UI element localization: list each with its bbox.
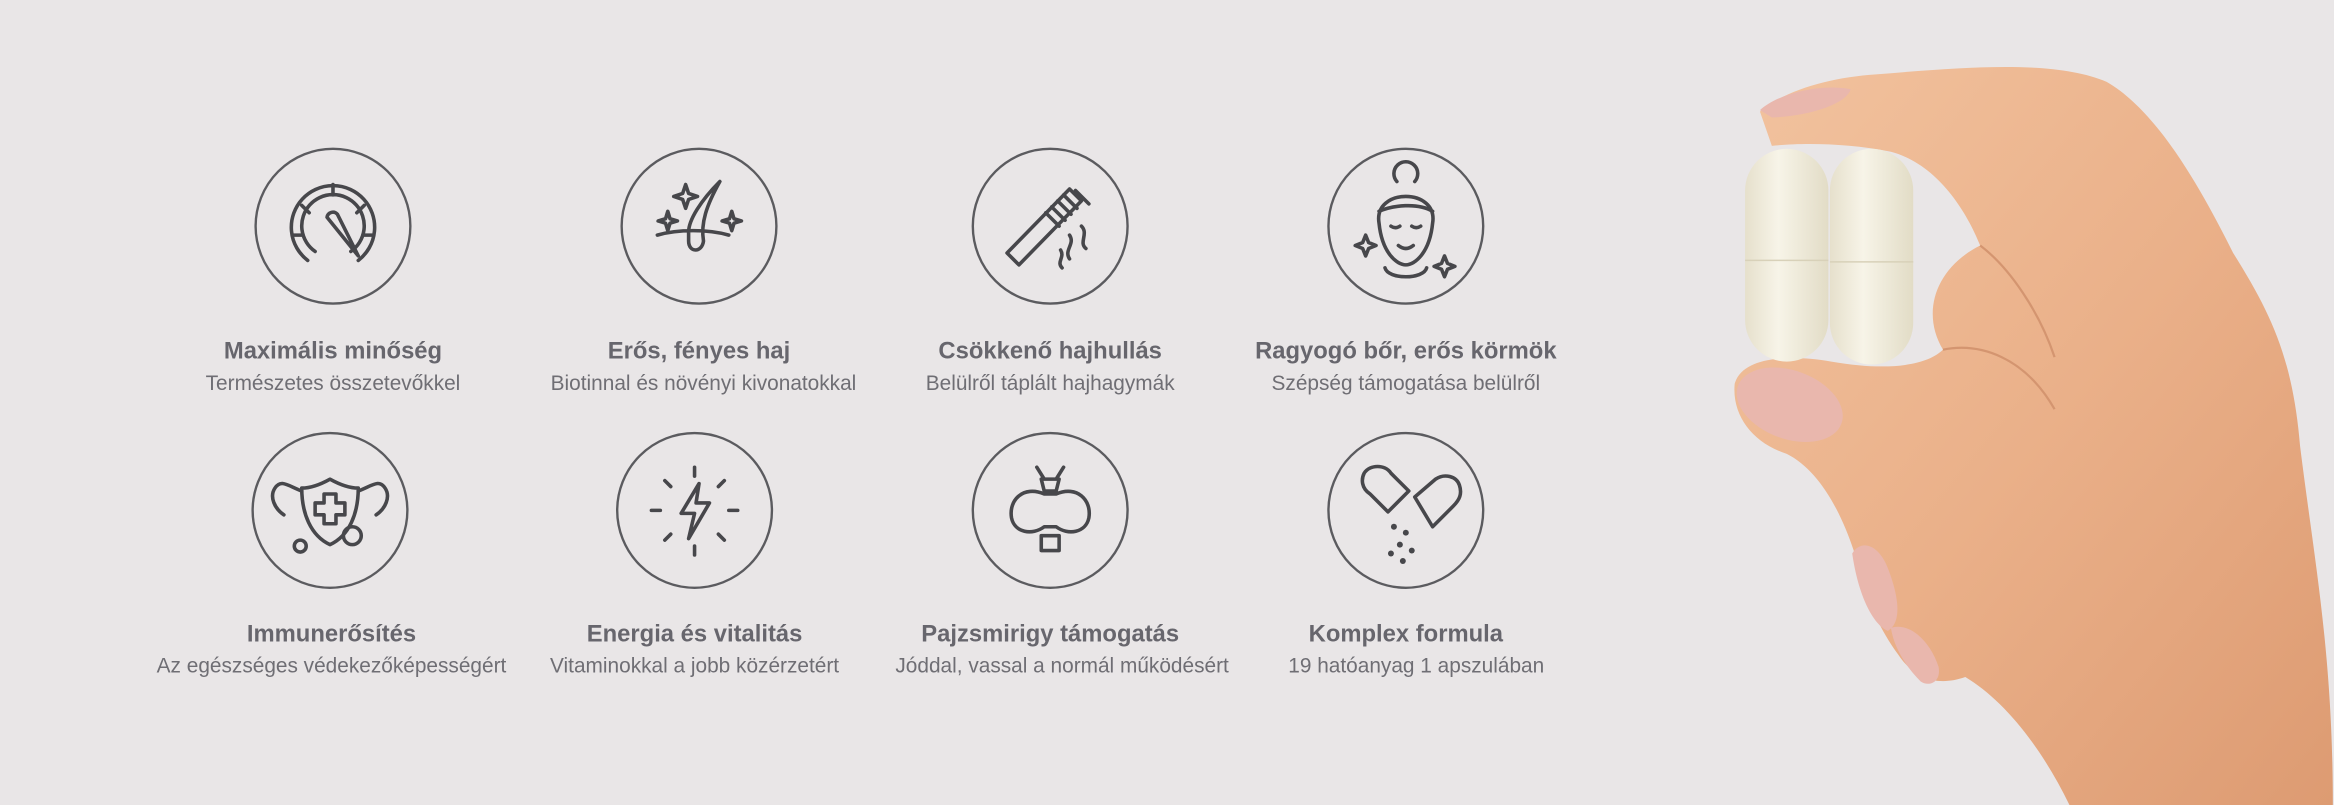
feature: Erős, fényes haj xyxy=(551,149,856,395)
feature: Pajzsmirigy támogatás: Jóddal, vassal a normál működésért xyxy=(895,655,1229,678)
feature: Energia és vitalitás: Vitaminokkal a jobb közérzetért xyxy=(550,655,839,678)
icon: opened capsule xyxy=(1328,433,1483,588)
capsules xyxy=(1745,149,1828,362)
icon: gauge xyxy=(256,149,410,304)
feature: Maximális minőség: Természetes összetevőkkel xyxy=(206,372,460,395)
icon: thyroid xyxy=(973,433,1128,588)
feature: Komplex formula: Komplex formula xyxy=(1309,620,1504,647)
feature: Erős, fényes haj: Biotinnal és növényi kivonatokkal xyxy=(551,372,856,395)
feature: Immunerősítés: Az egészséges védekezőképességért xyxy=(157,655,507,678)
feature: Immunerősítés xyxy=(157,433,507,678)
illustration: hand holding capsules xyxy=(1726,67,2333,805)
feature: Energia és vitalitás xyxy=(550,433,839,678)
feature: Csökkenő hajhullás: Belülről táplált hajhagymák xyxy=(926,372,1175,395)
feature: Komplex formula: 19 hatóanyag 1 apszulában xyxy=(1288,655,1544,678)
nails xyxy=(1726,87,1939,684)
feature: Ragyogó bőr, erős körmök xyxy=(1255,149,1557,395)
feature: Pajzsmirigy támogatás: Pajzsmirigy támogatás xyxy=(921,620,1179,647)
feature: Ragyogó bőr, erős körmök: Ragyogó bőr, erős körmök xyxy=(1255,338,1557,365)
feature: Csökkenő hajhullás xyxy=(926,149,1175,395)
icon: lightning xyxy=(617,433,772,588)
feature: Erős, fényes haj: Erős, fényes haj xyxy=(608,338,790,365)
feature: Csökkenő hajhullás: Csökkenő hajhullás xyxy=(938,338,1162,365)
feature: Maximális minőség: Maximális minőség xyxy=(224,338,442,365)
feature: Komplex formula xyxy=(1288,433,1544,678)
feature: Pajzsmirigy támogatás xyxy=(895,433,1229,678)
icon: face with towel xyxy=(1328,149,1483,304)
feature: Maximális minőség xyxy=(206,149,460,395)
feature: Ragyogó bőr, erős körmök: Szépség támogatása belülről xyxy=(1272,372,1540,395)
feature: Immunerősítés: Immunerősítés xyxy=(247,620,416,647)
feature: Energia és vitalitás: Energia és vitalitás xyxy=(587,620,802,647)
icon: comb xyxy=(973,149,1128,304)
icon: hair strand xyxy=(622,149,776,304)
icon: shield with arms xyxy=(253,433,407,588)
